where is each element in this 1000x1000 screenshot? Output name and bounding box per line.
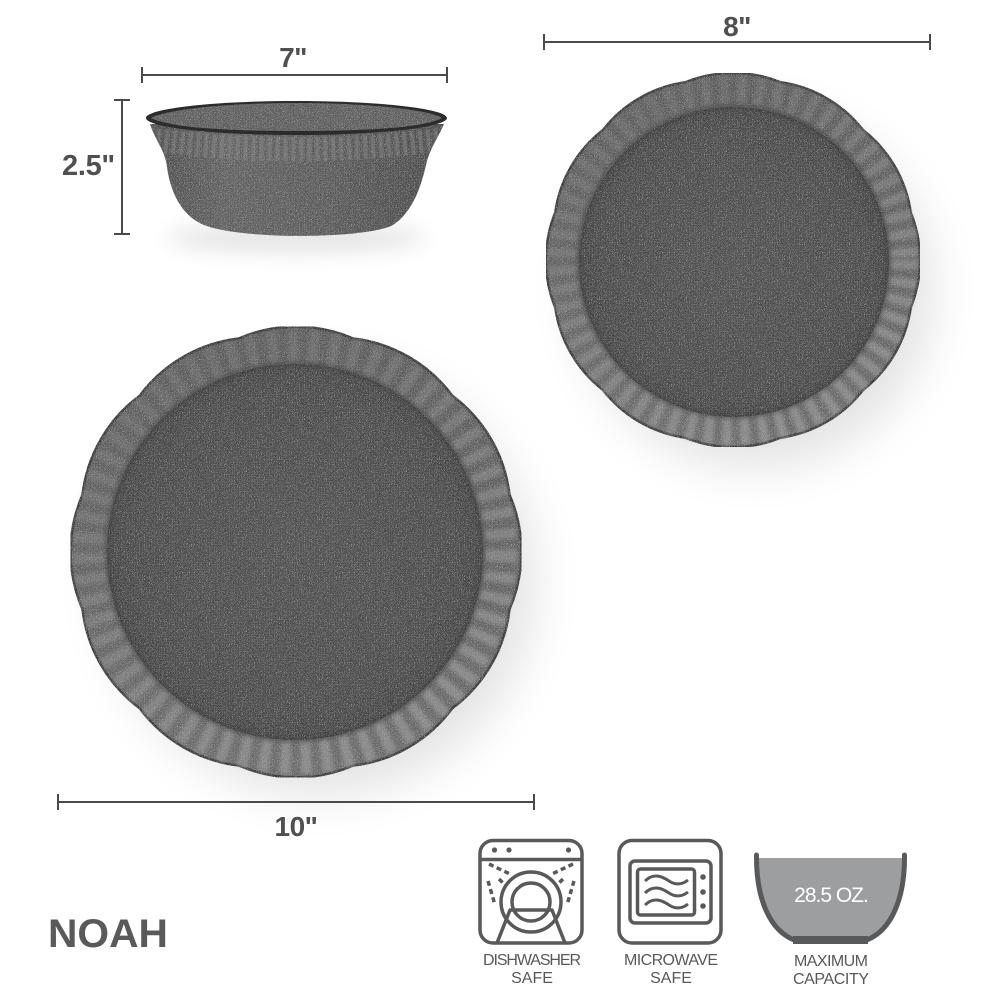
plate shadow — [577, 112, 933, 468]
plate rim — [546, 73, 920, 447]
large plate 10 inch — [71, 327, 535, 795]
dishwasher label: SAFE — [511, 970, 553, 987]
microwave label: MICROWAVE — [624, 952, 718, 969]
bowl rim — [146, 101, 447, 135]
microwave label: SAFE — [650, 970, 692, 987]
bowl shadow — [166, 223, 426, 253]
icon: maximum capacity bowl: 28.5 OZ. — [794, 884, 868, 907]
plate ribs — [89, 346, 501, 758]
plate well edge — [579, 107, 889, 417]
plate shadow — [105, 365, 535, 795]
plate rim — [71, 327, 521, 777]
7 inch dimension — [142, 42, 447, 83]
7 inch dimension: 7" — [279, 42, 307, 73]
plate ribs — [562, 89, 904, 431]
icon: dishwasher safe — [480, 840, 582, 987]
capacity label: CAPACITY — [793, 971, 869, 988]
2.5 inch dimension: 2.5" — [62, 150, 115, 182]
plate well — [107, 364, 483, 740]
2.5 inch dimension — [62, 100, 130, 234]
bowl with 7 inch width — [140, 101, 452, 253]
icon: microwave safe — [619, 840, 721, 987]
bowl ribbed band — [140, 143, 452, 154]
10 inch dimension — [58, 794, 534, 842]
medium plate 8 inch — [546, 73, 933, 468]
8 inch dimension: 8" — [723, 11, 751, 42]
product name: NOAH — [48, 912, 168, 956]
bowl body — [150, 124, 444, 236]
plate well — [579, 107, 889, 417]
icon: maximum capacity bowl — [756, 855, 905, 988]
plate well edge — [107, 364, 483, 740]
capacity label: MAXIMUM — [794, 953, 868, 970]
10 inch dimension: 10" — [275, 811, 317, 842]
8 inch dimension — [544, 11, 930, 50]
bowl interior — [147, 102, 445, 134]
dishwasher label: DISHWASHER — [483, 952, 581, 969]
